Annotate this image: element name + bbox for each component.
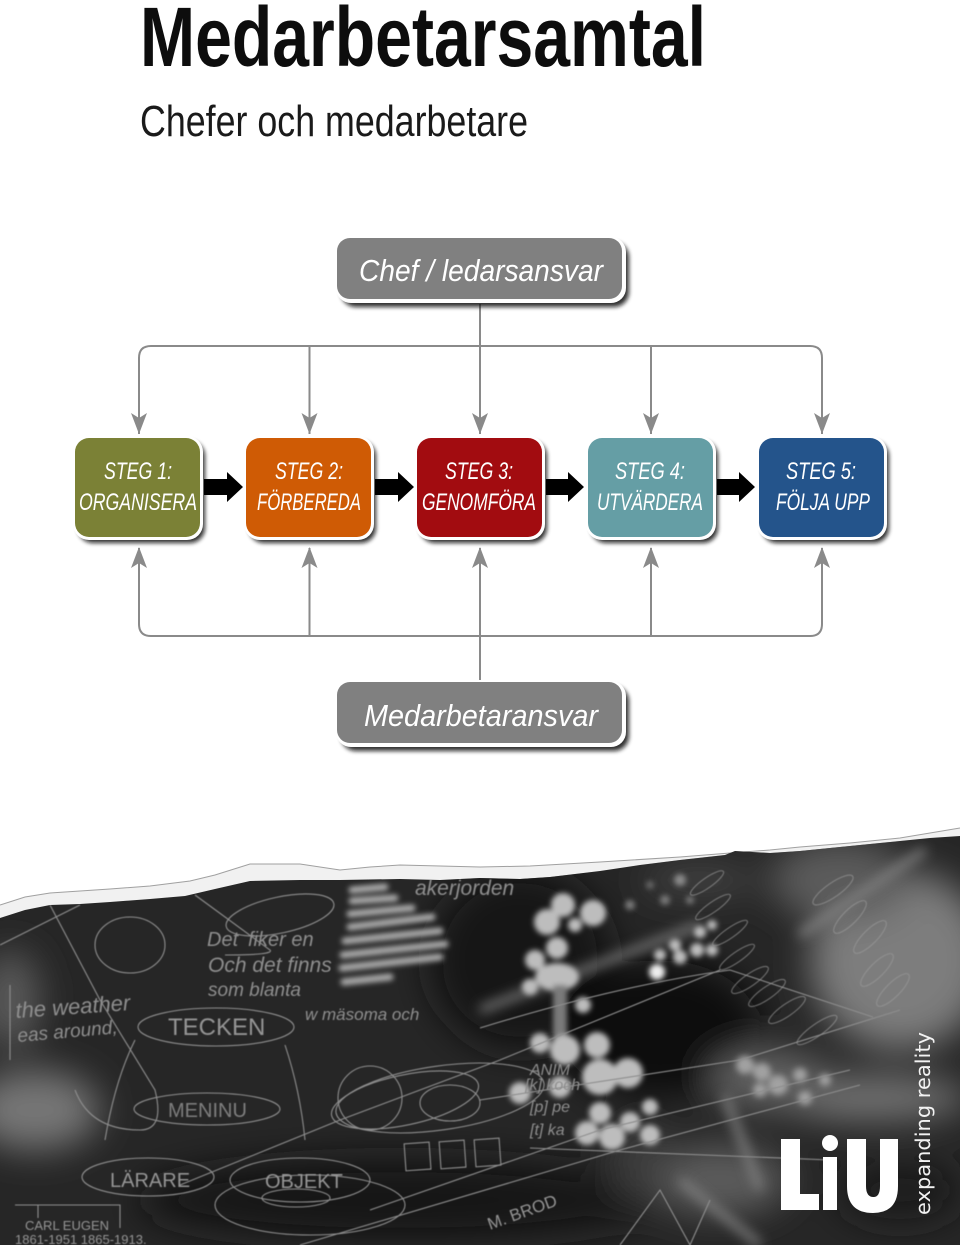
step 4: utvardera [586, 436, 718, 543]
step 1: organisera: ORGANISERA [79, 489, 197, 516]
chalk drawings and handwriting: Det [207, 929, 240, 951]
step 5: folja upp: FÖLJA UPP [776, 489, 870, 516]
photo: chalkboard with handwriting and blurred blossoms [0, 820, 960, 1245]
torn paper edge [0, 828, 960, 921]
chalk drawings and handwriting: w mäsoma och [305, 1005, 419, 1024]
arrow: step 2 to 3 [375, 472, 414, 502]
box: Chef/ledarsansvar [336, 237, 629, 307]
chalk drawings and handwriting: CARL EUGEN [25, 1218, 109, 1233]
chalk drawings and handwriting: [t] ka [529, 1122, 565, 1139]
box: Medarbetaransvar: Medarbetaransvar [364, 698, 600, 733]
subtitle: Chefer och medarbetare [140, 97, 528, 146]
streaks [480, 850, 925, 1245]
arrowheads: up to steps [131, 547, 830, 568]
chalk drawings and handwriting: ANIM [529, 1062, 571, 1079]
step 4: utvardera: STEG 4: [615, 458, 685, 485]
chalk drawings and handwriting: akerjorden [415, 877, 514, 900]
step 1: organisera [73, 436, 205, 543]
chalk drawings and handwriting: M. BROD [485, 1191, 560, 1234]
arrow: step 4 to 5 [717, 472, 755, 502]
blurred background tones [0, 840, 960, 1240]
chalk drawings and handwriting: [k] koch [524, 1077, 580, 1094]
step 1: organisera: STEG 1: [104, 458, 172, 485]
step 3: genomfora [415, 436, 547, 543]
step 2: forbereda [244, 436, 376, 543]
step 2: forbereda: FÖRBEREDA [257, 489, 361, 516]
tagline: expanding reality [911, 1032, 935, 1215]
logo: LiU [781, 1135, 898, 1213]
chalk drawings and handwriting [0, 867, 914, 1245]
box: Chef/ledarsansvar: Chef / ledarsansvar [359, 253, 605, 288]
chalk drawings and handwriting: OBJEKT [265, 1171, 343, 1193]
connectors: manager responsibility [139, 304, 822, 434]
step 5: folja upp [757, 436, 889, 543]
chalk drawings and handwriting: TECKEN [168, 1014, 265, 1041]
chalk drawings and handwriting: the weather [15, 990, 133, 1023]
chalk drawings and handwriting: [p] pe [529, 1099, 570, 1116]
blurred coil [342, 887, 445, 982]
step 5: folja upp: STEG 5: [786, 458, 856, 485]
step 3: genomfora: GENOMFÖRA [422, 489, 536, 516]
chalk drawings and handwriting: eas around, [17, 1017, 118, 1047]
step 3: genomfora: STEG 3: [445, 458, 513, 485]
step 2: forbereda: STEG 2: [275, 458, 343, 485]
chalk drawings and handwriting: fiker en [248, 929, 314, 951]
arrow: step 1 to 2 [204, 472, 243, 502]
chalk drawings and handwriting: LÄRARE [110, 1170, 190, 1192]
step 4: utvardera: UTVÄRDERA [597, 489, 703, 516]
chalk drawings and handwriting: som blanta [208, 980, 301, 1001]
box: Medarbetaransvar [336, 681, 629, 751]
arrow: step 3 to 4 [546, 472, 584, 502]
chalk drawings and handwriting: Och det finns [208, 954, 332, 977]
arrowheads: down to steps [131, 413, 830, 434]
blurred blossoms [509, 874, 718, 1150]
connectors: employee responsibility [139, 548, 822, 680]
chalk drawings and handwriting: MENINU [168, 1100, 247, 1122]
